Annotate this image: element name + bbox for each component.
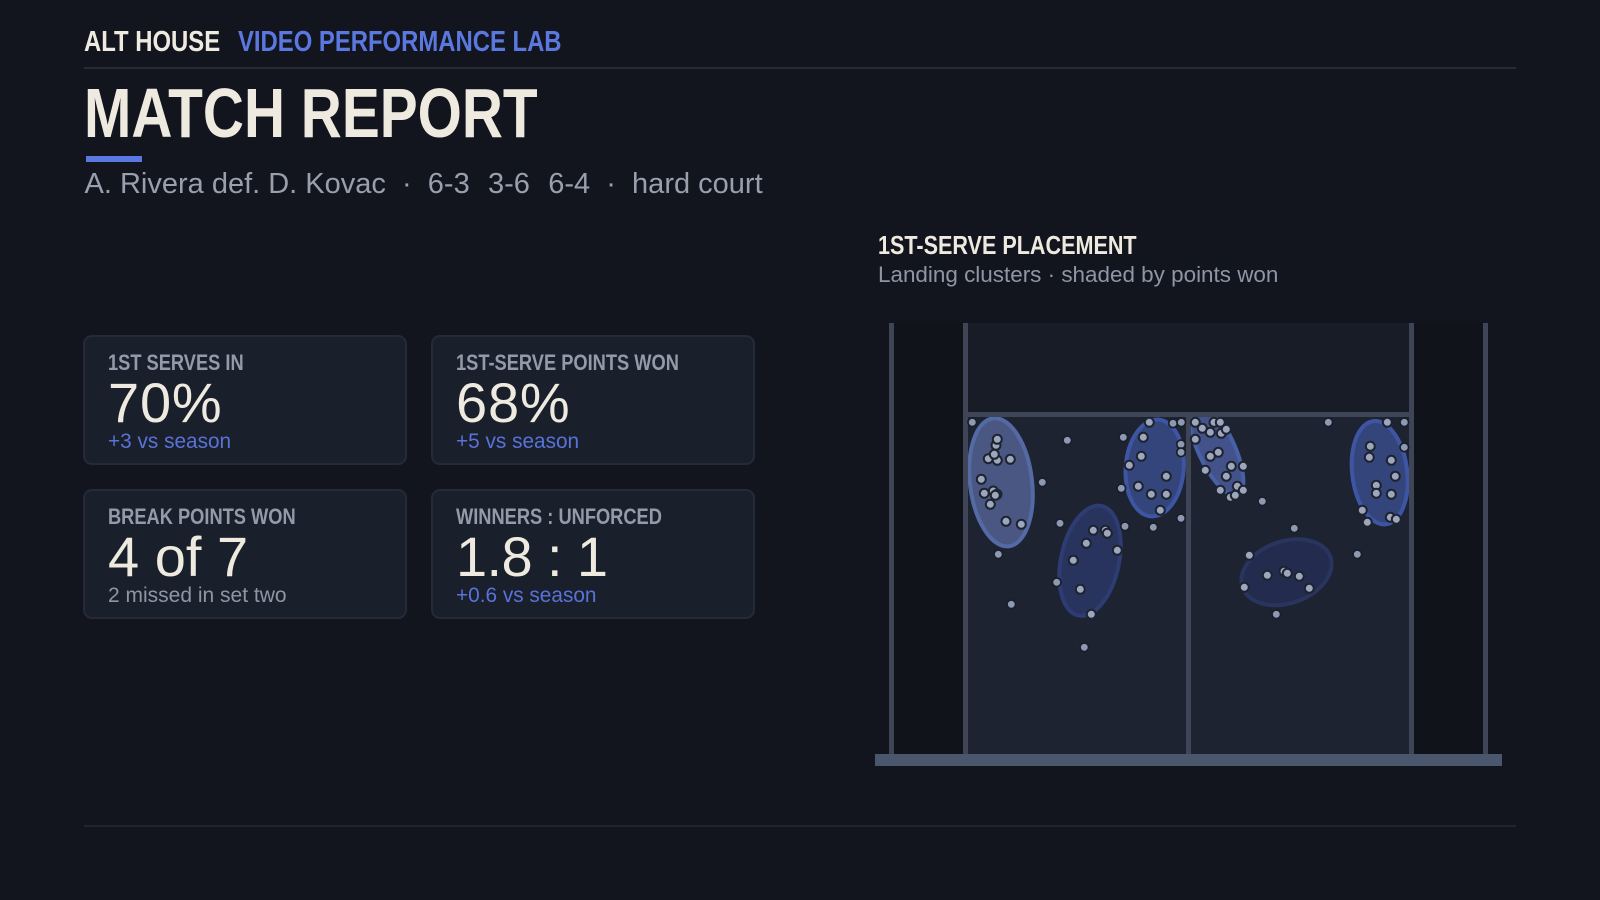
card: 1st serves in: 70% xyxy=(108,370,222,434)
card: break points won: BREAK POINTS WON xyxy=(108,504,296,528)
cluster: right box centre xyxy=(1191,417,1246,496)
accent bar xyxy=(86,156,142,162)
cluster: left box body xyxy=(1057,504,1123,618)
card: break points won xyxy=(83,489,407,619)
card: winners to unforced xyxy=(431,489,755,619)
cluster: left box wide xyxy=(968,417,1035,548)
card: 1st-serve points won xyxy=(431,335,755,465)
card: 1st serves in xyxy=(83,335,407,465)
match subtitle: A. Rivera def. D. Kovac · 6-3 3-6 6-4 · hard court xyxy=(84,168,763,200)
card: 1st serves in: 1ST SERVES IN xyxy=(108,350,244,374)
card: 1st-serve points won: +5 vs season xyxy=(456,430,579,453)
chart: serve placement court xyxy=(875,323,1502,766)
card: winners to unforced: 1.8 : 1 xyxy=(456,524,607,588)
chart heading: 1ST-SERVE PLACEMENT xyxy=(878,230,1137,260)
card: break points won: 4 of 7 xyxy=(108,524,248,588)
court surface xyxy=(889,323,1488,754)
brand name: ALT HOUSE xyxy=(84,26,220,58)
card: 1st serves in: +3 vs season xyxy=(108,430,231,453)
cluster: left box centre xyxy=(1122,417,1187,519)
net bar xyxy=(875,754,1502,766)
card: 1st-serve points won: 1ST-SERVE POINTS WON xyxy=(456,350,679,374)
cluster: right box wide xyxy=(1350,419,1409,526)
cluster: right box body xyxy=(1239,537,1334,608)
card: winners to unforced: WINNERS : UNFORCED xyxy=(456,504,662,528)
card: 1st-serve points won: 68% xyxy=(456,370,570,434)
serve landing points in clusters xyxy=(977,418,1401,619)
serve landing outliers xyxy=(968,418,1409,652)
panel: stat cards xyxy=(83,335,755,619)
card: winners to unforced: +0.6 vs season xyxy=(456,584,596,607)
lab name: VIDEO PERFORMANCE LAB xyxy=(238,26,562,58)
brand line xyxy=(84,26,562,58)
card: break points won: 2 missed in set two xyxy=(108,584,287,607)
title: MATCH REPORT xyxy=(84,74,538,152)
chart subheading: Landing clusters · shaded by points won xyxy=(878,262,1278,286)
